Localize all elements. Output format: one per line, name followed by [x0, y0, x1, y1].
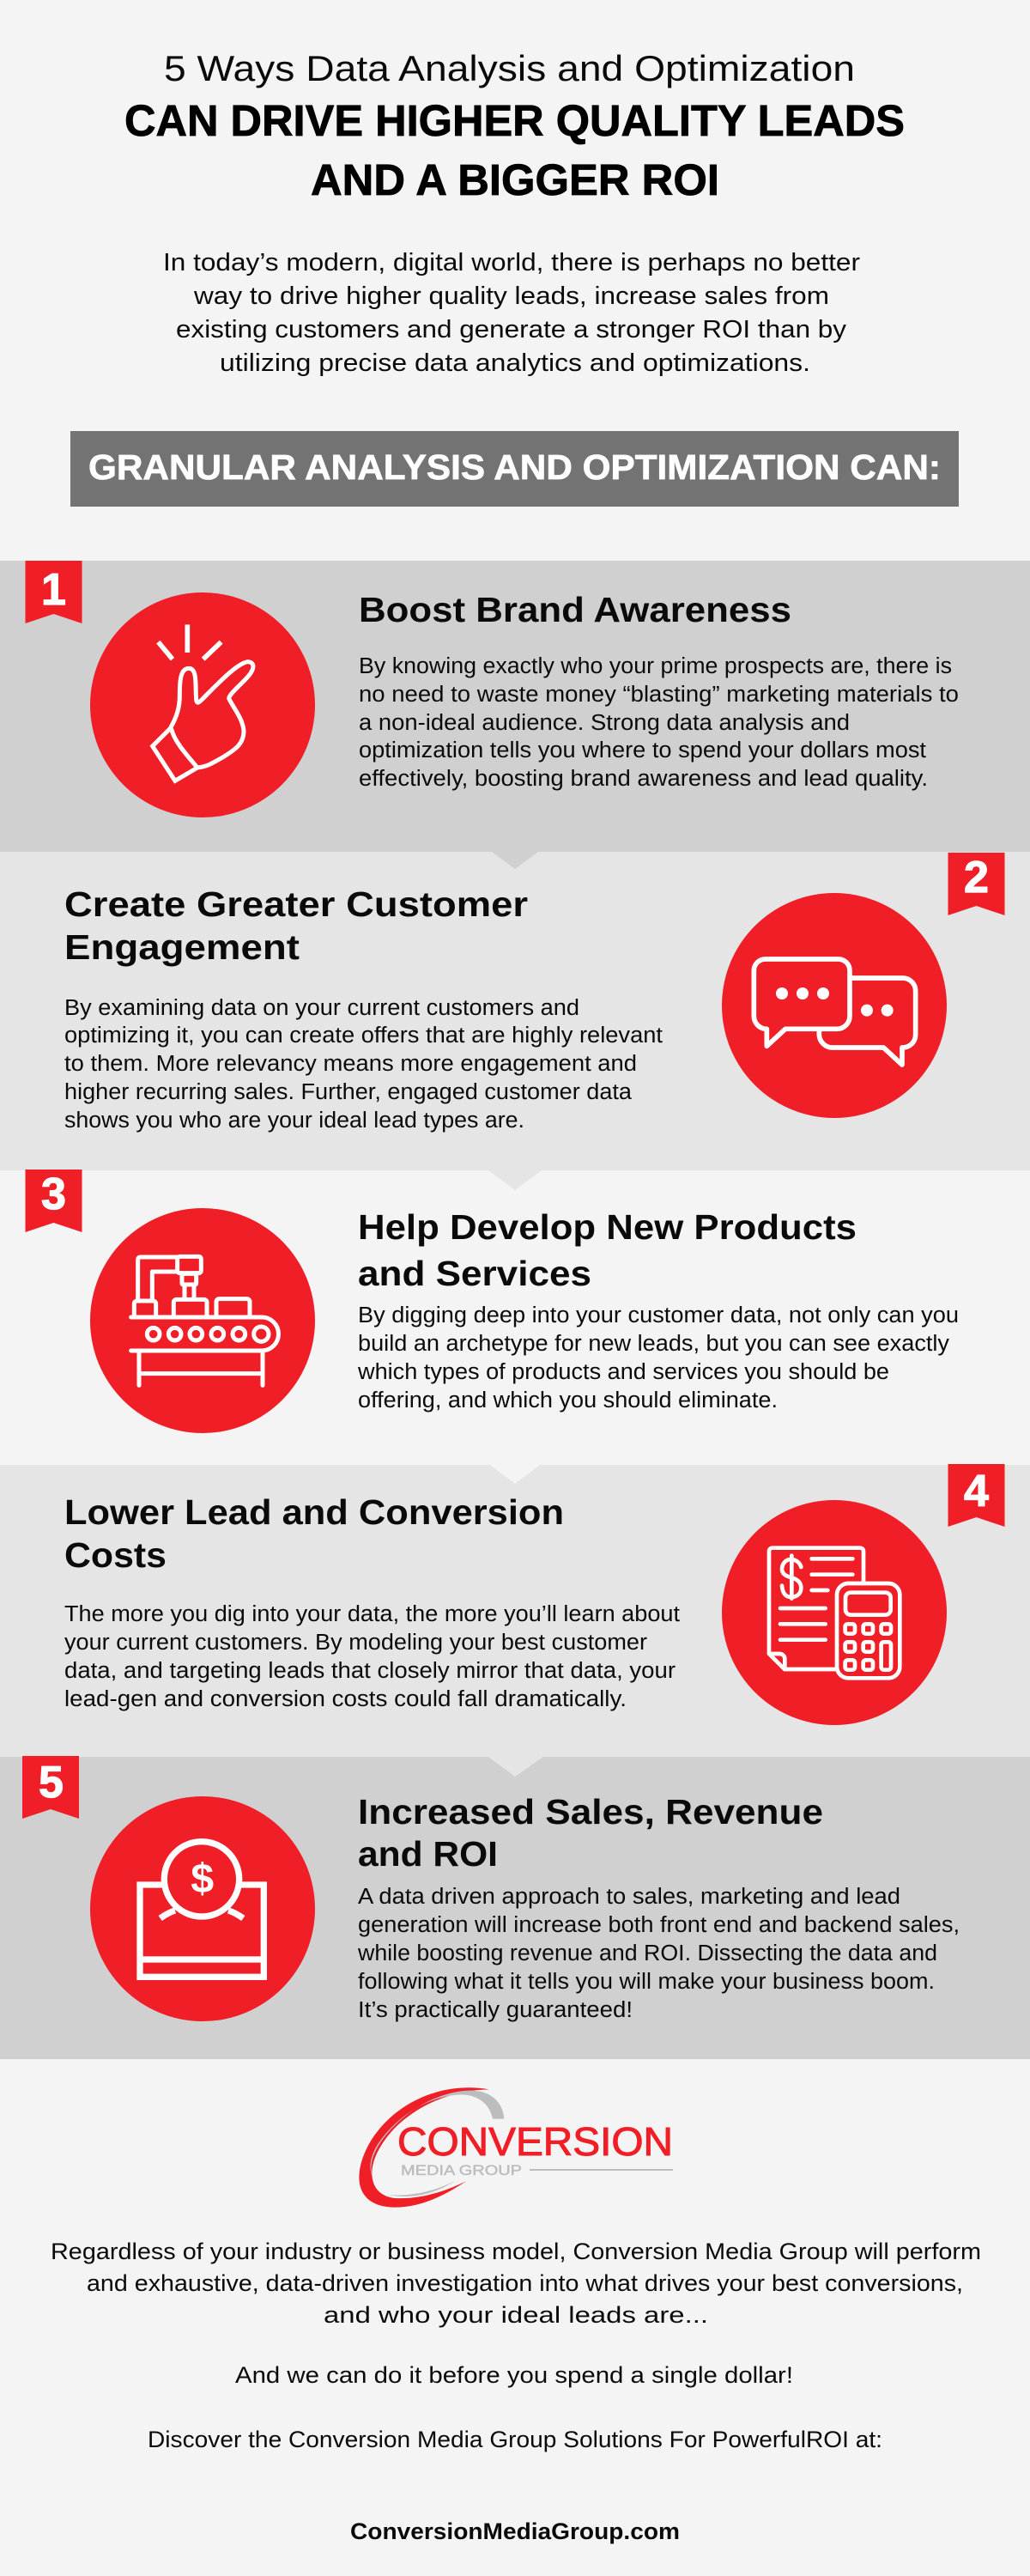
arrow: section 1 pointer — [492, 852, 538, 869]
icon: invoice and calculator — [722, 1500, 947, 1725]
body text: offering, and which you should eliminate. — [358, 1388, 778, 1413]
body text: The more you dig into your data, the more you’ll learn about — [64, 1602, 680, 1626]
body text: data, and targeting leads that closely mirror that data, your — [64, 1659, 676, 1683]
body text — [64, 996, 663, 1133]
intro text: In today’s modern, digital world, there is perhaps no better — [163, 249, 860, 276]
intro text: existing customers and generate a stronger ROI than by — [176, 316, 847, 343]
body text: to them. More relevancy means more engagement and — [64, 1052, 637, 1076]
heading: Boost Brand Awareness — [359, 590, 791, 629]
intro text: way to drive higher quality leads, increase sales from — [193, 283, 829, 310]
body text: generation will increase both front end and backend sales, — [358, 1913, 960, 1937]
panel: boost brand awareness — [0, 561, 1030, 852]
body text: shows you who are your ideal lead types are. — [64, 1109, 524, 1133]
ribbon number 5 — [22, 1756, 79, 1819]
closing text: Discover the Conversion Media Group Solutions For PowerfulROI at: — [148, 2427, 882, 2452]
heading: Help Develop New Products — [358, 1207, 857, 1247]
closing text: Regardless of your industry or business model, Conversion Media Group will perform — [51, 2239, 981, 2264]
body text — [357, 1885, 960, 2022]
closing text — [51, 2239, 981, 2452]
arrow: section 4 pointer — [488, 1757, 543, 1777]
body text: while boosting revenue and ROI. Dissecting the data and — [357, 1941, 937, 1965]
ribbon number 2: 2 — [964, 853, 989, 902]
heading: Engagement — [64, 927, 300, 967]
body text: higher recurring sales. Further, engaged customer data — [64, 1080, 633, 1104]
ribbon number 4: 4 — [964, 1467, 989, 1516]
banner heading — [70, 431, 959, 507]
icon: conveyor belt — [90, 1208, 315, 1433]
heading: Create Greater Customer — [64, 884, 528, 924]
icon: speech bubbles — [722, 893, 947, 1118]
website link: ConversionMediaGroup.com — [350, 2518, 680, 2544]
body text: A data driven approach to sales, marketing and lead — [358, 1885, 900, 1909]
body text: optimizing it, you can create offers that are highly relevant — [64, 1024, 663, 1048]
body text — [357, 1303, 959, 1413]
intro text: utilizing precise data analytics and optimizations. — [220, 349, 810, 377]
body text: By knowing exactly who your prime prospects are, there is — [359, 654, 952, 678]
icon: snapping fingers — [90, 592, 315, 817]
icon: dollar coin and slot: $ — [191, 1856, 214, 1902]
heading: and Services — [358, 1254, 591, 1293]
body text: following what it tells you will make your business boom. — [358, 1970, 935, 1994]
ribbon number 3 — [26, 1170, 82, 1232]
body text: optimization tells you where to spend your dollars most — [359, 738, 926, 762]
body text — [359, 654, 959, 791]
body text: a non-ideal audience. Strong data analysis and — [359, 711, 850, 735]
body text: no need to waste money “blasting” marketing materials to — [359, 683, 959, 707]
heading: Costs — [64, 1535, 167, 1575]
logo: conversion media group: CONVERSION — [397, 2119, 673, 2164]
panel: create greater customer engagement — [0, 852, 1030, 1170]
icon: dollar coin and slot — [90, 1796, 315, 2021]
title: AND A BIGGER ROI — [311, 155, 719, 204]
body text: your current customers. By modeling your best customer — [64, 1631, 648, 1655]
title — [124, 48, 905, 204]
panel: increased sales, revenue and roi — [0, 1756, 1030, 2059]
panel: help develop new products and services — [0, 1170, 1030, 1465]
logo: conversion media group — [359, 2087, 673, 2208]
closing text: and who your ideal leads are... — [324, 2302, 708, 2328]
body text: lead-gen and conversion costs could fall dramatically. — [64, 1687, 627, 1711]
ribbon number 3: 3 — [41, 1170, 66, 1219]
heading — [64, 884, 528, 967]
ribbon number 4 — [948, 1464, 1004, 1527]
heading: Lower Lead and Conversion — [64, 1492, 564, 1532]
banner heading: GRANULAR ANALYSIS AND OPTIMIZATION CAN: — [88, 447, 941, 487]
body text: build an archetype for new leads, but you can see exactly — [358, 1332, 949, 1356]
body text — [64, 1602, 680, 1711]
ribbon number 5: 5 — [39, 1758, 64, 1807]
arrow: section 2 pointer — [488, 1170, 542, 1190]
heading — [358, 1207, 857, 1293]
ribbon number 2 — [948, 853, 1004, 915]
arrow: section 3 pointer — [490, 1465, 540, 1484]
body text: It’s practically guaranteed! — [358, 1998, 633, 2022]
body text: which types of products and services you should be — [357, 1360, 889, 1384]
closing text: And we can do it before you spend a single dollar! — [235, 2362, 793, 2388]
closing text: and exhaustive, data-driven investigation into what drives your best conversions, — [87, 2270, 963, 2296]
title: 5 Ways Data Analysis and Optimization — [164, 48, 855, 88]
ribbon number 1 — [26, 561, 82, 623]
body text: effectively, boosting brand awareness and lead quality. — [359, 767, 928, 791]
title: CAN DRIVE HIGHER QUALITY LEADS — [124, 96, 905, 145]
panel: lower lead and conversion costs — [0, 1464, 1030, 1757]
body text: By examining data on your current customers and — [64, 996, 579, 1020]
heading — [358, 1792, 823, 1874]
heading: Increased Sales, Revenue — [358, 1792, 823, 1832]
heading — [64, 1492, 564, 1575]
intro text — [163, 249, 860, 377]
body text: By digging deep into your customer data, not only can you — [358, 1303, 959, 1327]
ribbon number 1: 1 — [41, 565, 66, 615]
heading: and ROI — [358, 1834, 498, 1874]
logo: conversion media group: MEDIA GROUP — [401, 2162, 522, 2178]
